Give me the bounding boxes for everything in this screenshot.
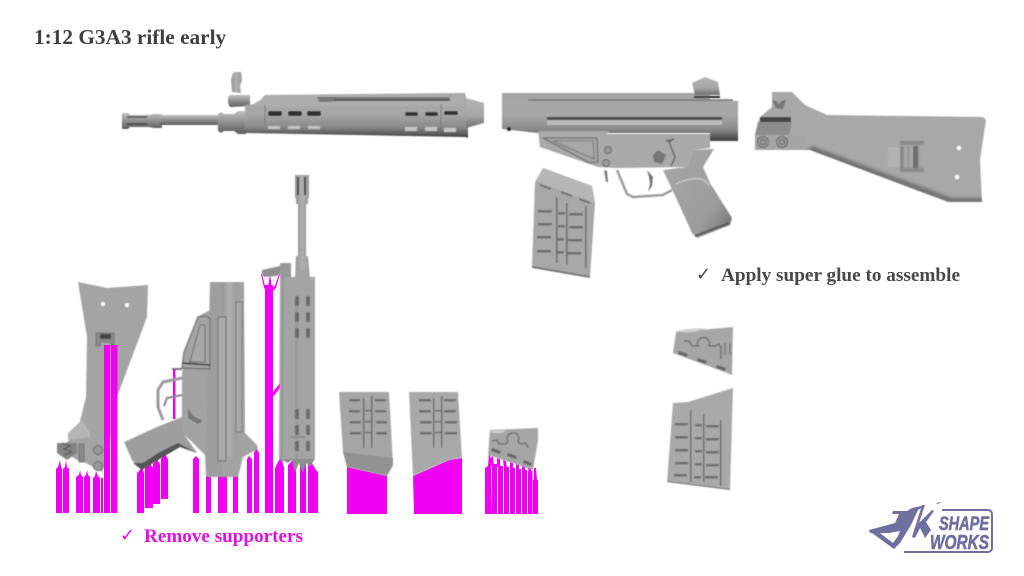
rifle receiver with grip [502, 77, 738, 238]
printed receiver with supports [124, 282, 259, 513]
instruction: apply super glue: Apply super glue to assemble [721, 266, 960, 286]
rifle front: barrel and handguard [122, 72, 484, 138]
handguard [245, 93, 468, 138]
supports [56, 345, 118, 513]
printed magazine one with support block [339, 392, 393, 514]
logo: JK Shape Works: WORKS [930, 532, 989, 554]
front sight [231, 72, 242, 93]
instruction: remove supporters: ✓ [120, 525, 135, 546]
logo: JK Shape Works [869, 502, 992, 554]
upper magazine [532, 168, 595, 278]
tip [466, 98, 484, 128]
printed barrel and handguard with supports [261, 175, 318, 513]
grip [663, 149, 732, 238]
magazine catch and trigger guard [617, 170, 672, 197]
instruction: remove supporters: Remove supporters [144, 527, 303, 547]
slots [268, 111, 458, 116]
assembled small part [673, 327, 733, 375]
upper receiver [502, 93, 738, 141]
lower receiver [538, 131, 710, 168]
printed magazine two with support block [409, 392, 462, 514]
title: 1:12 G3A3 rifle early [34, 25, 227, 49]
logo mark [869, 505, 934, 549]
printed stock with supports [56, 282, 148, 513]
logo text: SHAPE [939, 514, 990, 535]
assembled magazine [667, 388, 733, 490]
barrel [160, 115, 220, 125]
logo frame [904, 510, 992, 552]
supports [137, 369, 259, 513]
supports [261, 274, 318, 513]
flash hider [122, 113, 162, 129]
instruction: apply super glue: ✓ [696, 264, 711, 285]
stock [755, 92, 986, 204]
printed small part with supports [485, 428, 538, 514]
